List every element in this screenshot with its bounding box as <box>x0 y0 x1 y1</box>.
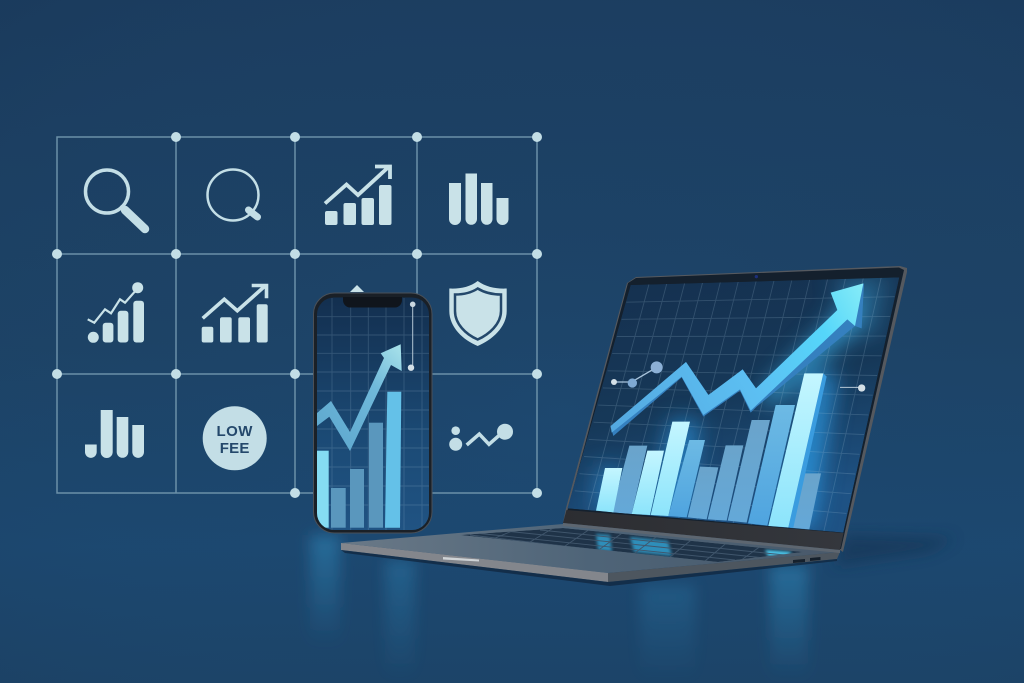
laptop screen gridlines <box>575 277 895 531</box>
icon grid panel <box>52 132 542 498</box>
icon: growth chart with arrow <box>325 166 392 225</box>
laptop base <box>341 524 840 586</box>
laptop lid <box>563 266 907 553</box>
icon: low fee badge: FEE <box>220 440 250 457</box>
icon: bar chart three tall bars <box>85 410 144 458</box>
icon: dots and trend line <box>449 424 513 451</box>
laptop webcam <box>755 275 758 278</box>
phone <box>314 293 432 533</box>
icon: magnifier thin <box>208 170 258 220</box>
phone node line <box>408 302 416 371</box>
phone bars <box>316 392 401 528</box>
laptop <box>341 266 907 586</box>
laptop keyboard <box>460 527 803 562</box>
icon: magnifier large <box>86 170 145 229</box>
laptop bars <box>596 373 827 529</box>
laptop screen <box>567 273 899 533</box>
phone arrow <box>317 344 402 451</box>
icon: low fee badge <box>203 406 267 470</box>
laptop screen nodes <box>611 361 865 392</box>
icon: bar chart four bars <box>449 174 508 225</box>
icon: growth chart with arrow small <box>202 286 268 342</box>
icon: hidden arrow tip behind phone <box>350 285 364 292</box>
icon: low fee badge: LOW <box>216 423 253 440</box>
phone notch <box>343 297 402 308</box>
laptop screen glow <box>593 273 893 527</box>
icon: shield <box>449 281 507 346</box>
phone gridlines <box>317 298 429 530</box>
laptop arrow <box>611 283 864 436</box>
icon: growth chart with dots <box>88 282 144 343</box>
